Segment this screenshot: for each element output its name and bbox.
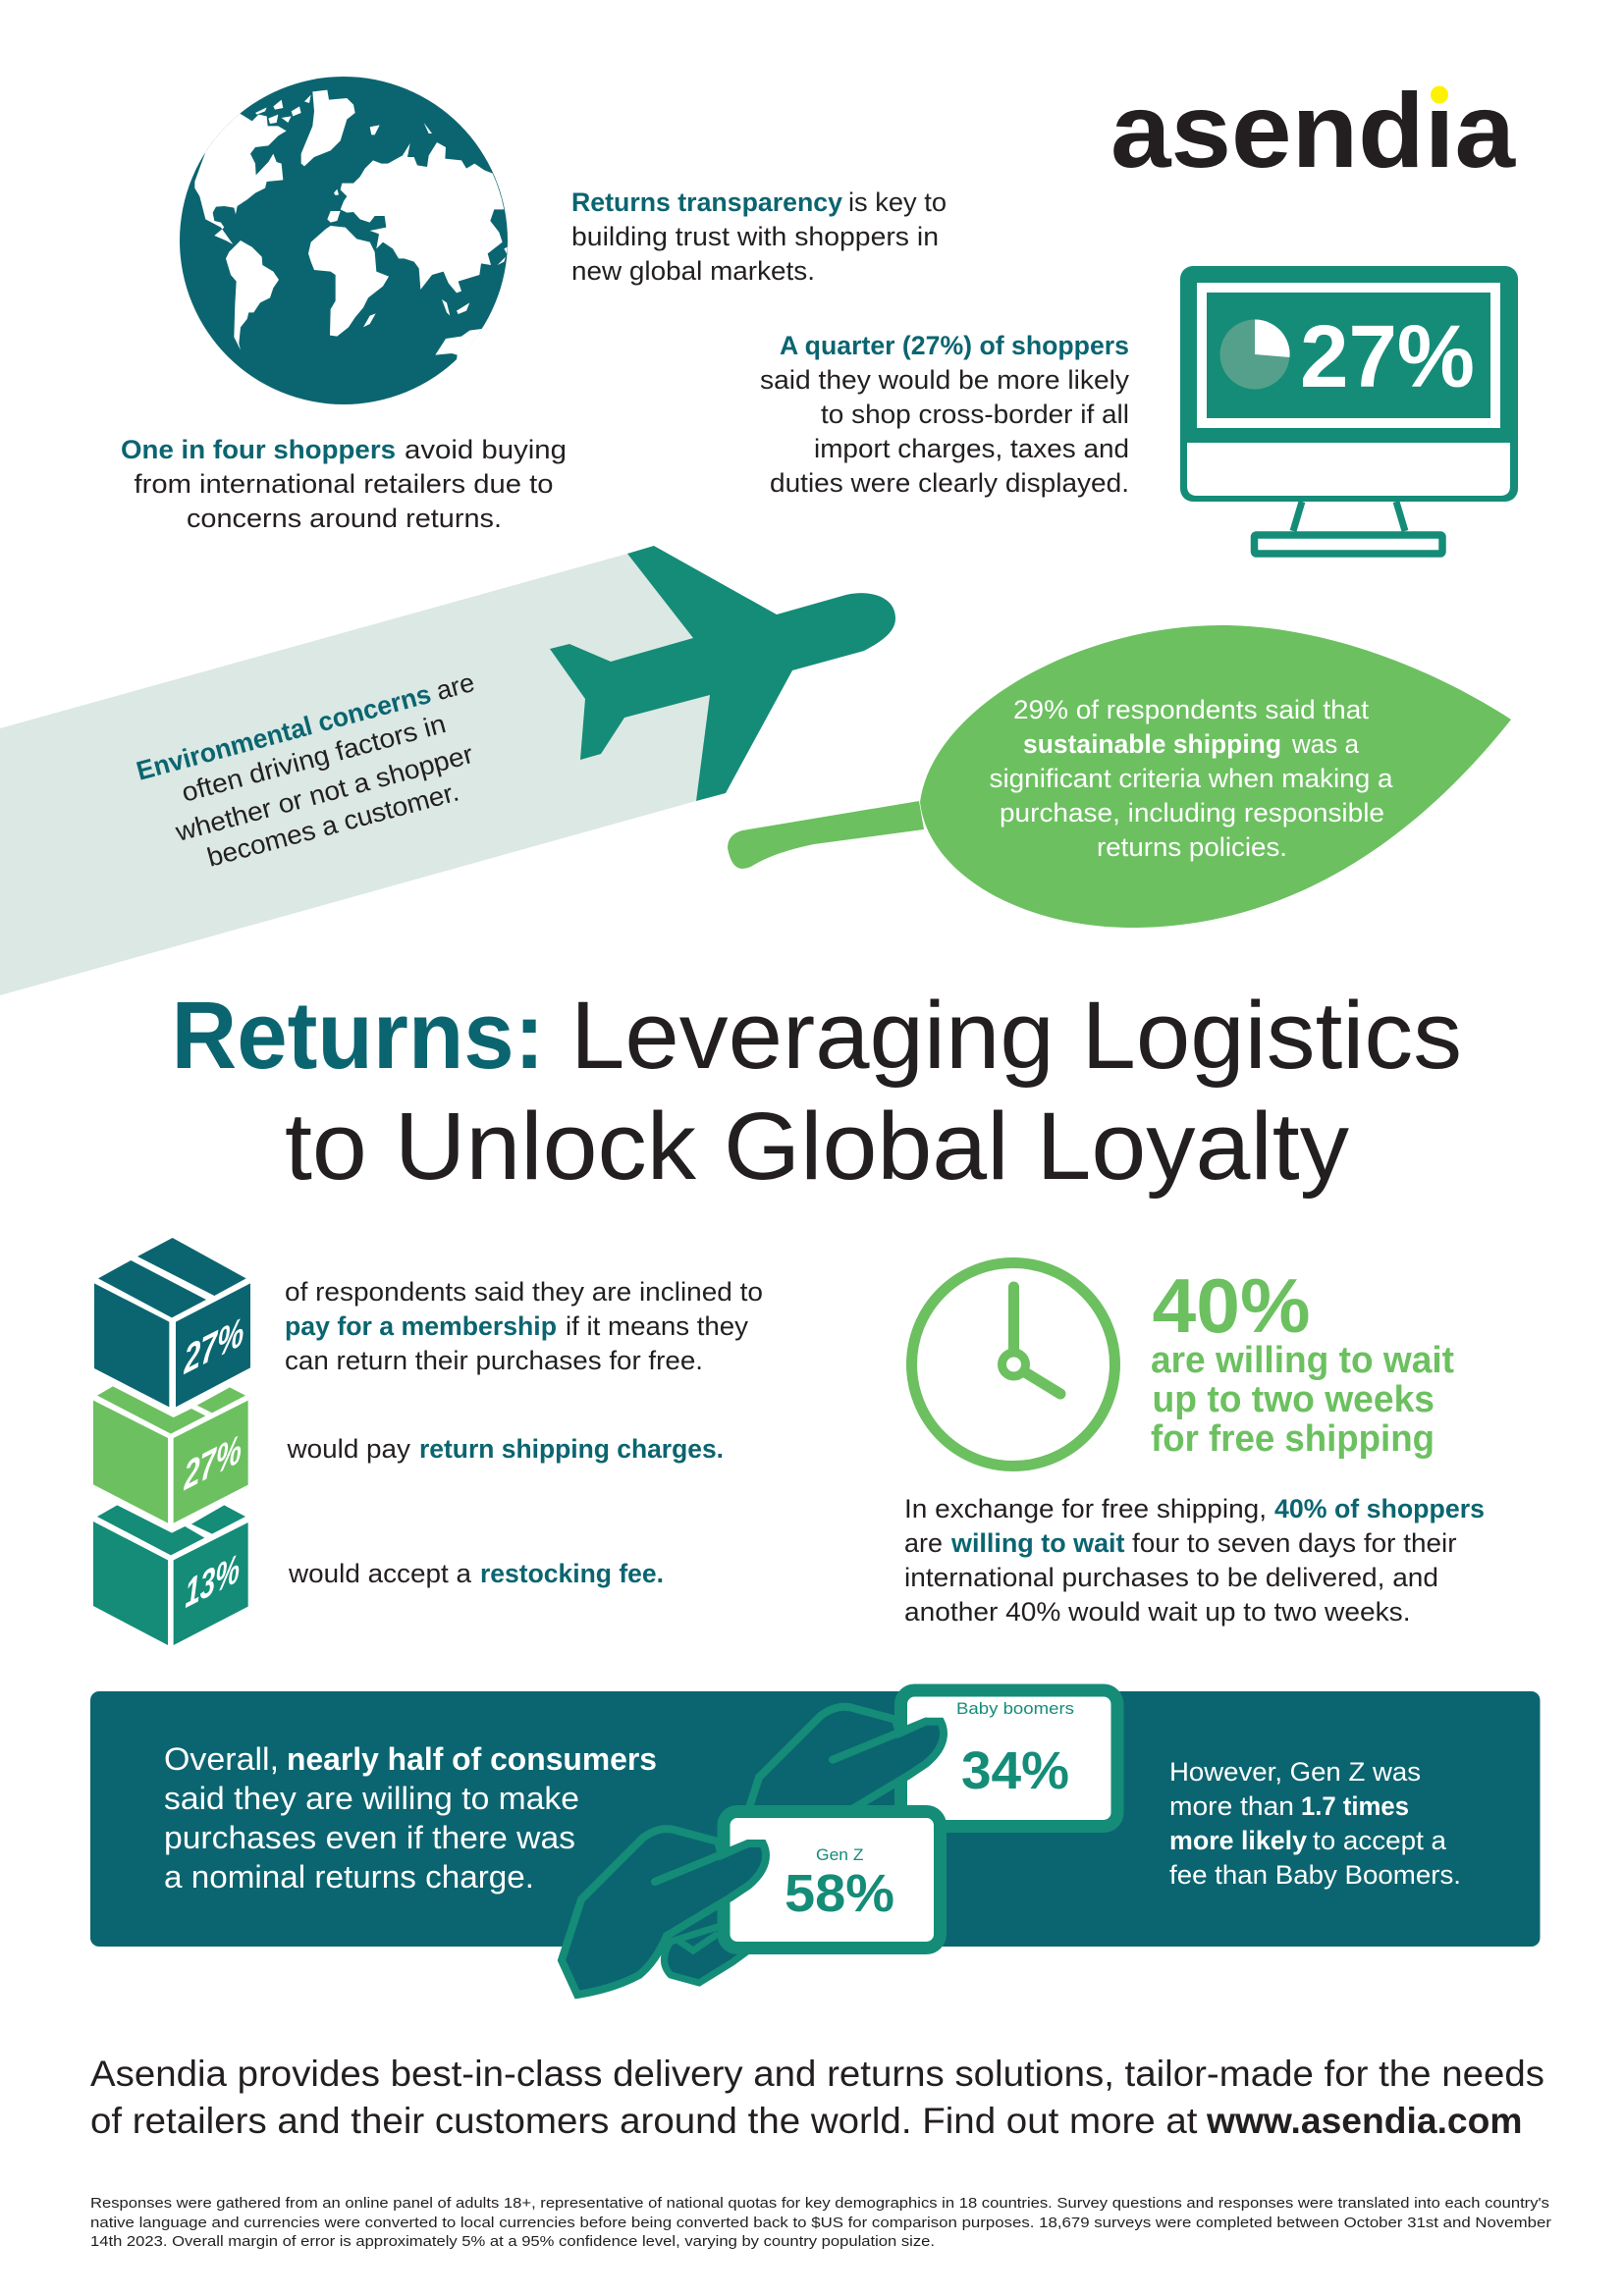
- text: footnote: Responses were gathered from an online panel of adults 18+, representative of national quotas for key demographics in 18 countries. Survey questions and responses were translated into each country's: [90, 2195, 1549, 2212]
- text: closing statement: [90, 2054, 1544, 2141]
- icon: airplane: [550, 546, 895, 801]
- text: returns transparency: Returns transparency: [571, 187, 842, 217]
- text: returns transparency: is key to: [848, 187, 947, 217]
- text: a quarter of shoppers: A quarter (27%) of shoppers: [780, 331, 1129, 360]
- text: closing statement: www.asendia.com: [1206, 2101, 1522, 2141]
- text: free shipping exchange: another 40% would wait up to two weeks.: [904, 1597, 1410, 1627]
- card: gen z 58%: [724, 1812, 941, 1948]
- stat: 40% wait: are willing to wait: [1151, 1340, 1454, 1381]
- text: gen z more likely: to accept a: [1313, 1826, 1447, 1855]
- text: one in four shoppers: One in four shoppers: [121, 435, 396, 464]
- text: gen z more likely: more than: [1169, 1791, 1294, 1821]
- text: closing statement: Asendia provides best-in-class delivery and returns solutions, tailor-made for the needs: [90, 2054, 1544, 2094]
- text: footnote: 14th 2023. Overall margin of error is approximately 5% at a 95% confidence level, varying by country population size.: [90, 2233, 935, 2250]
- stat: 40% wait: for free shipping: [1151, 1418, 1435, 1460]
- title: Leveraging Logistics: [570, 982, 1462, 1089]
- card: gen z 58%: 58%: [785, 1864, 894, 1923]
- text: a quarter of shoppers: said they would be more likely: [760, 365, 1130, 395]
- card: gen z 58%: Gen Z: [816, 1845, 864, 1864]
- text: nearly half of consumers: Overall,: [164, 1741, 279, 1777]
- text: footnote: native language and currencies were converted to local currencies before being converted back to $US for comparison purposes. 18,679 surveys were completed between October 31st and November: [90, 2215, 1551, 2231]
- card: baby boomers 34%: [901, 1690, 1117, 1826]
- text: a quarter of shoppers: duties were clearly displayed.: [770, 468, 1129, 498]
- text: free shipping exchange: are: [904, 1528, 943, 1558]
- text: environmental concerns: are: [433, 667, 477, 706]
- icon: leaf callout: returns policies.: [1097, 832, 1287, 862]
- icon: leaf callout: was a: [1291, 729, 1360, 759]
- title: to Unlock Global Loyalty: [285, 1093, 1350, 1200]
- text: environmental concerns: becomes a customer.: [204, 776, 462, 873]
- text: a quarter of shoppers: to shop cross-border if all: [821, 400, 1129, 429]
- text: gen z more likely: However, Gen Z was: [1169, 1757, 1421, 1787]
- icon: lower hand: [562, 1829, 766, 1995]
- icon: leaf callout: sustainable shipping: [1023, 729, 1281, 759]
- text: free shipping exchange: [904, 1494, 1485, 1627]
- icon: stacked parcels: [93, 1238, 250, 1645]
- text: restocking fee: [288, 1559, 664, 1588]
- text: pay for a membership: of respondents said they are inclined to: [285, 1277, 763, 1307]
- icon: leaf callout: purchase, including responsible: [1000, 798, 1384, 828]
- icon: monitor with 27%: [1180, 266, 1518, 554]
- text: gen z more likely: 1.7 times: [1301, 1791, 1409, 1821]
- stat: 40% wait: up to two weeks: [1153, 1379, 1435, 1420]
- parcel: 27% return shipping: 27%: [184, 1427, 242, 1500]
- text: return shipping charges: return shipping charges.: [419, 1434, 724, 1464]
- text: restocking fee: restocking fee.: [480, 1559, 664, 1588]
- text: environmental concerns: Environmental concerns: [134, 679, 434, 786]
- text: free shipping exchange: In exchange for free shipping,: [904, 1494, 1267, 1523]
- icon: leaf callout: [728, 625, 1511, 928]
- text: return shipping charges: [286, 1434, 724, 1464]
- stat: 40% wait: 40%: [1153, 1262, 1310, 1349]
- text: environmental concerns: whether or not a shopper: [172, 739, 476, 847]
- icon: monitor with 27%: 27%: [1300, 308, 1475, 406]
- text: free shipping exchange: 40% of shoppers: [1274, 1494, 1485, 1523]
- text: restocking fee: would accept a: [288, 1559, 472, 1588]
- text: footnote: [90, 2195, 1551, 2250]
- text: free shipping exchange: willing to wait: [950, 1528, 1125, 1558]
- text: returns transparency: new global markets.: [571, 256, 815, 286]
- text: nearly half of consumers: purchases even if there was: [164, 1820, 575, 1855]
- text: nearly half of consumers: said they are willing to make: [164, 1781, 579, 1816]
- card: baby boomers 34%: 34%: [961, 1741, 1069, 1800]
- text: gen z more likely: fee than Baby Boomers.: [1169, 1860, 1461, 1890]
- icon: lower hand fingers: [664, 1924, 751, 1983]
- text: pay for a membership: [285, 1277, 763, 1375]
- parcel: 13% restocking: [93, 1505, 248, 1645]
- icon: leaf callout: significant criteria when making a: [990, 764, 1394, 793]
- text: pay for a membership: if it means they: [566, 1311, 749, 1341]
- text: one in four shoppers: avoid buying: [405, 435, 567, 464]
- text: returns transparency: building trust with shoppers in: [571, 222, 939, 251]
- text: environmental concerns: often driving factors in: [179, 709, 449, 808]
- text: return shipping charges: would pay: [286, 1434, 411, 1464]
- logo: asendia: asendia: [1110, 71, 1516, 189]
- text: gen z more likely: more likely: [1169, 1826, 1307, 1855]
- parcel: 27% return shipping: [93, 1386, 248, 1523]
- text: free shipping exchange: four to seven days for their: [1132, 1528, 1457, 1558]
- title: [171, 982, 1462, 1200]
- text: pay for a membership: can return their purchases for free.: [285, 1346, 703, 1375]
- text: one in four shoppers: [121, 435, 567, 533]
- card: baby boomers 34%: Baby boomers: [956, 1699, 1074, 1718]
- text: gen z more likely: [1169, 1757, 1461, 1890]
- band: plane trail: [0, 554, 710, 995]
- text: free shipping exchange: international purchases to be delivered, and: [904, 1563, 1438, 1592]
- text: pay for a membership: pay for a membership: [285, 1311, 557, 1341]
- text: one in four shoppers: concerns around returns.: [187, 504, 502, 533]
- parcel: 13% restocking: 13%: [185, 1546, 240, 1618]
- text: nearly half of consumers: nearly half of consumers: [287, 1741, 657, 1777]
- text: one in four shoppers: from international retailers due to: [134, 469, 554, 499]
- panel: nominal returns charge: [90, 1691, 1540, 1947]
- text: a quarter of shoppers: [760, 331, 1130, 498]
- title: Returns:: [171, 982, 544, 1089]
- text: a quarter of shoppers: import charges, taxes and: [814, 434, 1129, 463]
- parcel: 27% membership: 27%: [184, 1309, 244, 1384]
- text: nearly half of consumers: [164, 1741, 657, 1895]
- icon: clock: [911, 1262, 1115, 1467]
- text: environmental concerns: [134, 667, 477, 873]
- text: closing statement: of retailers and their customers around the world. Find out more at: [90, 2101, 1198, 2141]
- icon: globe: [180, 77, 508, 404]
- text: returns transparency: [571, 187, 947, 286]
- icon: leaf callout: 29% of respondents said that: [1013, 695, 1370, 724]
- parcel: 27% membership: [94, 1238, 250, 1407]
- text: nearly half of consumers: a nominal returns charge.: [164, 1859, 534, 1895]
- stat: 40% wait: [1151, 1262, 1454, 1460]
- icon: upper hand: [739, 1707, 944, 1873]
